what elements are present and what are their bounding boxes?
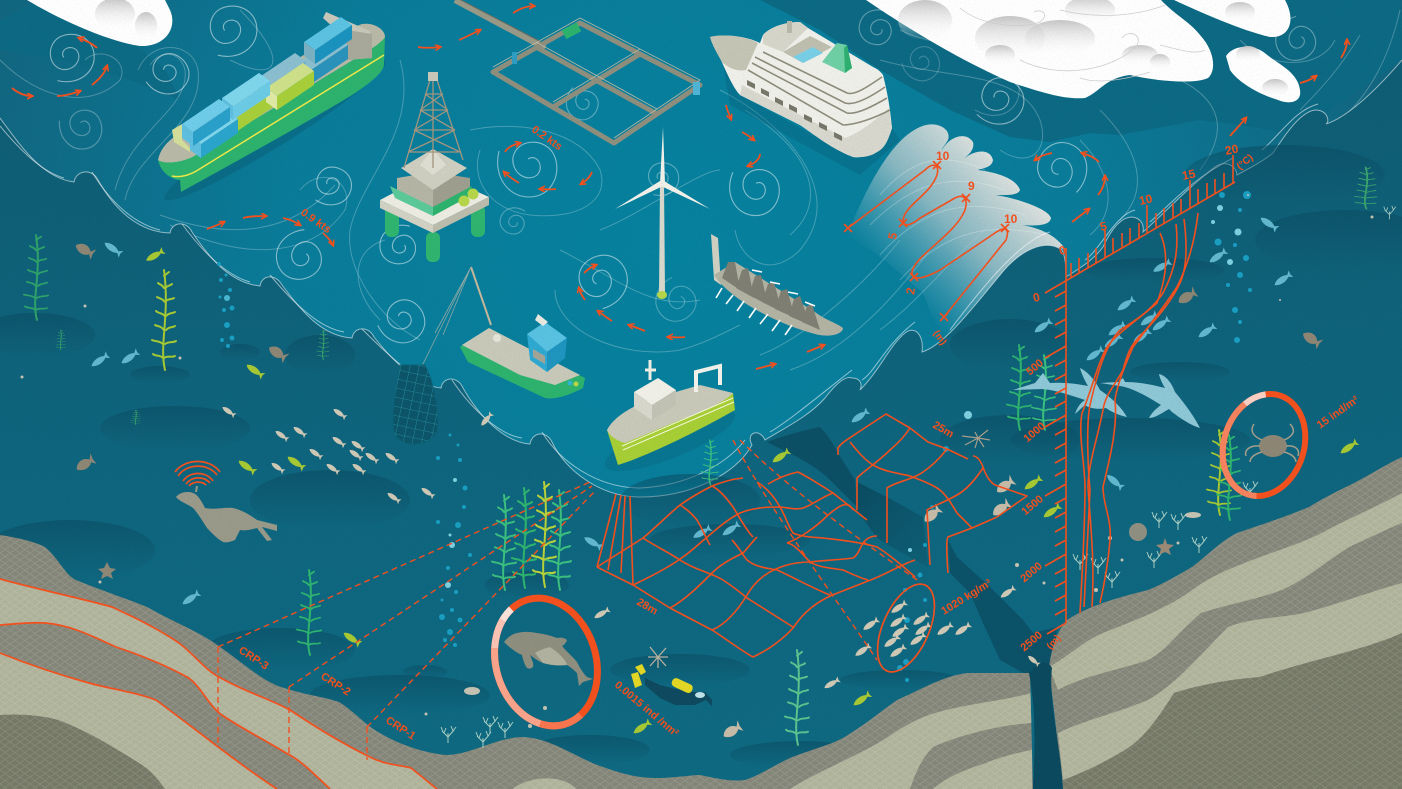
measurement labels: 15 ind/m² [1315,394,1362,431]
sea life: coral, rock, pebbles and star [20,194,1396,748]
axis numbers: 500 [1024,357,1046,378]
measurement labels: 28m [634,596,660,618]
current arrows and speed labels: 0.9 kts [298,207,333,236]
axis numbers: (°C) [1235,152,1256,172]
axis numbers: 2000 [1018,560,1045,585]
tagged seal [175,462,277,542]
ice shadows [0,0,1402,142]
measurement labels [612,394,1362,740]
fishing boat [415,267,585,398]
cargo ship [156,12,394,212]
density dashed lines and ellipse [733,440,946,680]
wave transect loops: 2 [903,286,918,296]
wave streaks [870,160,1045,280]
axis numbers: (m) [1045,633,1063,652]
wave transect loops: 9 [968,179,975,193]
wave transect loops [844,149,1018,347]
sediment core lines [0,579,437,789]
measurement labels: 0.0015 ind /nm² [612,679,681,740]
wave outline [0,60,1402,497]
axis numbers: 1500 [1019,493,1046,518]
brittle star [648,647,668,668]
wave transect loops: (m) [931,328,948,347]
axis numbers: 15 [1181,166,1197,183]
current arrows and speed labels: 0.2 kts [529,124,564,153]
core sample dashed lines [218,482,596,760]
large ice sheet [866,0,1213,98]
canyon walls [767,427,1057,676]
ice floe top right [1174,0,1290,37]
core sample dashed lines: CRP-2 [318,670,353,698]
measurement labels: 1020 kg/m³ [939,577,994,618]
density ring with crab [1210,383,1318,507]
sea life: kelp [24,167,1376,745]
cruise ship [710,21,900,175]
seafloor mounds [0,145,1402,769]
trench neck [1029,663,1063,789]
axis numbers: 5 [1099,219,1108,234]
ice floe top left [27,0,172,46]
lime boat [598,360,742,483]
big breaking wave [846,124,1066,338]
sea life: fish [73,215,1359,741]
axis numbers: 20 [1224,141,1240,158]
wave transect loops: 10 [936,149,950,163]
current arrows and speed labels [12,6,1347,369]
axis numbers: 10 [1138,191,1154,208]
oil rig [380,72,489,262]
axis numbers: 0 [1058,243,1067,258]
axis numbers: 0 [1032,290,1041,305]
net mesh [393,365,438,444]
canyon brittle star [962,430,990,448]
core sample dashed lines: CRP-3 [236,644,271,672]
sea life: bubbles [217,191,1252,682]
measurement labels: 25m [930,419,956,441]
ocean current swirls [50,4,1322,353]
density net upper [838,414,1027,573]
density net large [597,472,915,657]
temperature profile axes [1045,155,1235,634]
dolphins [1013,368,1200,428]
axis numbers [1018,141,1256,654]
axis numbers: 1000 [1021,420,1048,445]
rowing canoe [711,234,843,336]
small ice floe [1226,46,1300,102]
axis numbers: 2500 [1018,629,1045,654]
rock layers left and right [0,457,1402,789]
core sample dashed lines: CRP-1 [383,714,418,742]
wind turbine [615,127,710,299]
pier [455,0,545,48]
wave transect loops: 10 [1004,212,1018,226]
wave transect loops: 5 [885,231,900,241]
fishing net [393,365,438,444]
diver [631,664,712,706]
ocean currents streamlines [0,10,1400,370]
density ring with dugong [479,585,613,739]
fish farm cages [493,18,700,143]
